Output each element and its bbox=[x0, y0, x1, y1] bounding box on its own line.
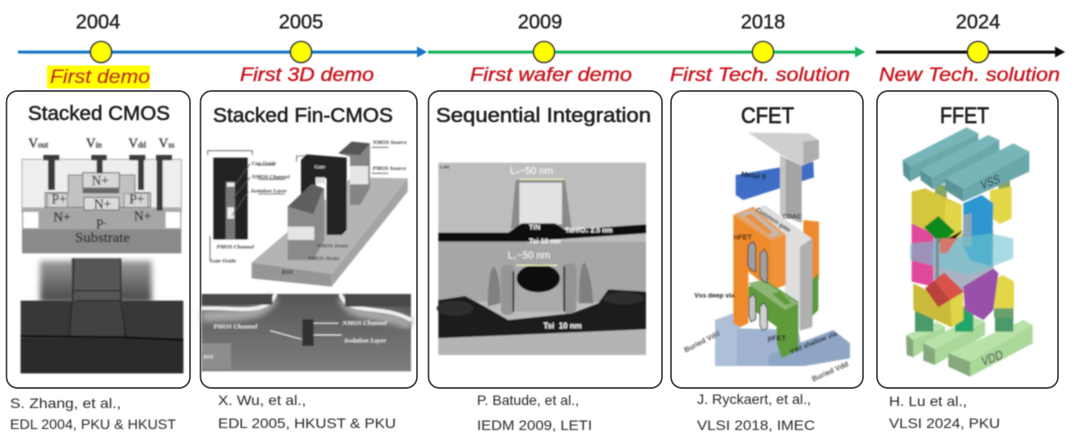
citation: Batude: P. Batude, et al., bbox=[477, 392, 579, 408]
diagram: CMOS cross-section: N+ bbox=[53, 209, 70, 224]
milestone: First wafer demo: First wafer demo bbox=[470, 65, 632, 86]
arrow: blue segment bbox=[18, 46, 427, 58]
photo: SEM cross-section: Isolation Layer bbox=[343, 338, 387, 345]
diagram: CMOS cross-section: N+ bbox=[134, 209, 151, 224]
milestone: First 3D demo: First 3D demo bbox=[240, 65, 374, 86]
citation: Wu: EDL 2005, HKUST & PKU bbox=[218, 415, 396, 431]
heading: Sequential Integration: Sequential Integration bbox=[436, 105, 651, 127]
year 2009 marker: 2009 bbox=[518, 12, 562, 34]
year 2005 marker bbox=[279, 12, 323, 62]
panel: Sequential Integration bbox=[428, 91, 662, 433]
citation: Ryckaert: VLSI 2018, IMEC bbox=[697, 417, 815, 433]
diagram: fin device 3D view: BOX bbox=[282, 270, 294, 276]
milestone: New Tech. solution: New Tech. solution bbox=[879, 65, 1060, 86]
heading: Stacked Fin-CMOS: Stacked Fin-CMOS bbox=[213, 105, 393, 127]
diagram: CFET 3D structure: pFET bbox=[768, 334, 786, 343]
diagram: CMOS cross-section: N+ bbox=[94, 197, 111, 212]
diagram: CMOS cross-section: P+ bbox=[52, 191, 67, 206]
photo: SEM cross-section: BOX bbox=[202, 356, 214, 361]
panel: Stacked Fin-CMOS bbox=[200, 91, 417, 431]
arrow: black segment bbox=[876, 46, 1065, 58]
diagram: CFET 3D structure bbox=[682, 133, 850, 383]
diagram: fin device 3D view: Gate Oxide bbox=[210, 259, 237, 265]
diagram: fin device 3D view: NMOS Drain bbox=[316, 243, 348, 249]
diagram: fin device 3D view: NMOS Channel bbox=[251, 175, 290, 181]
diagram: CMOS cross-section bbox=[22, 135, 181, 253]
diagram: FFET 3D structure bbox=[903, 127, 1033, 377]
photo: SEM cross-section: NMOS Channel bbox=[341, 320, 387, 327]
panel: Stacked CMOS bbox=[6, 91, 190, 432]
diagram: CFET 3D structure: Vdd shallow via bbox=[789, 331, 838, 356]
year 2005 marker: 2005 bbox=[279, 12, 323, 34]
photo: TEM of sequential transistors: Lₙ~50 nm bbox=[510, 166, 553, 177]
year 2018 marker bbox=[741, 12, 785, 62]
diagram: fin device 3D view: PMOS Drain bbox=[308, 256, 339, 262]
year 2018 marker: 2018 bbox=[741, 12, 785, 34]
diagram: CMOS cross-section: Vin bbox=[86, 135, 102, 150]
diagram: FFET 3D structure: VDD bbox=[981, 347, 1004, 369]
diagram: fin device 3D view: Gate bbox=[314, 165, 326, 171]
diagram: FFET 3D structure: VSS bbox=[980, 172, 1001, 192]
diagram: CFET 3D structure: Metal 0 bbox=[741, 170, 766, 181]
timeline bbox=[18, 12, 1065, 88]
citation: Zhang: S. Zhang, et al., bbox=[10, 395, 121, 411]
citation: Batude bbox=[477, 392, 592, 433]
photo: TEM of sequential transistors bbox=[437, 163, 646, 355]
diagram: CFET 3D structure: CDAC bbox=[782, 214, 802, 221]
diagram: CFET 3D structure: Vss deep via bbox=[694, 292, 735, 299]
diagram: CFET 3D structure: Common gate bbox=[755, 207, 792, 234]
diagram: fin device 3D view: PMOS Channel bbox=[217, 245, 254, 251]
photo: TEM cross-section bbox=[21, 258, 183, 373]
panel: CFET bbox=[671, 91, 863, 433]
diagram: fin device 3D view bbox=[208, 140, 408, 287]
citation: Ryckaert: J. Ryckaert, et al., bbox=[697, 391, 811, 407]
citation: Batude: IEDM 2009, LETI bbox=[477, 417, 592, 433]
photo: TEM of sequential transistors: Tsi 10 nm bbox=[543, 322, 582, 331]
diagram: fin device 3D view: Isolation Layer bbox=[250, 189, 287, 195]
year 2024 marker: 2024 bbox=[956, 12, 1000, 34]
citation: Ryckaert bbox=[697, 391, 815, 433]
year 2009 marker bbox=[518, 12, 562, 62]
diagram: fin device 3D view: Cap Oxide bbox=[252, 161, 277, 167]
year 2004 marker: 2004 bbox=[76, 12, 120, 34]
year 2004 marker bbox=[76, 12, 120, 62]
year 2024 marker bbox=[956, 12, 1000, 62]
photo: SEM cross-section: PMOS Channel bbox=[213, 324, 257, 331]
photo: TEM of sequential transistors: L꜀~50 nm bbox=[508, 251, 550, 262]
diagram: CMOS cross-section: N+ bbox=[92, 173, 109, 188]
citation: Wu: X. Wu, et al., bbox=[218, 392, 306, 408]
photo: SEM cross-section bbox=[202, 294, 411, 371]
citation: Wu bbox=[218, 392, 396, 431]
photo: TEM of sequential transistors: TaHfO₂ 2.5 nm bbox=[565, 228, 613, 235]
milestone: First demo: First demo bbox=[50, 67, 150, 88]
milestone: First Tech. solution: First Tech. solution bbox=[670, 65, 850, 86]
diagram: CFET 3D structure: Buried Vdd bbox=[682, 329, 721, 354]
arrow: green segment bbox=[428, 46, 865, 58]
heading: Stacked CMOS: Stacked CMOS bbox=[28, 103, 170, 125]
diagram: CMOS cross-section: Substrate bbox=[75, 230, 130, 245]
diagram: CMOS cross-section: P bbox=[96, 217, 103, 232]
diagram: CMOS cross-section: Vdd bbox=[128, 135, 146, 150]
citation: Zhang: EDL 2004, PKU & HKUST bbox=[10, 416, 176, 432]
diagram: CMOS cross-section: P+ bbox=[129, 191, 144, 206]
photo: TEM of sequential transistors: TIN bbox=[529, 224, 540, 231]
citation: Lu bbox=[889, 393, 1000, 431]
heading: FFET: FFET bbox=[940, 103, 989, 128]
citation: Lu: VLSI 2024, PKU bbox=[889, 415, 1000, 431]
diagram: fin device 3D view: PMOS Source bbox=[373, 166, 407, 172]
diagram: fin device 3D view: NMOS Source bbox=[372, 140, 407, 146]
diagram: CFET 3D structure: nFET bbox=[734, 232, 753, 241]
diagram: CMOS cross-section: Vss bbox=[159, 135, 175, 150]
diagram: CMOS cross-section: - bbox=[103, 218, 106, 227]
photo: TEM of sequential transistors: Tsi 10 nm bbox=[529, 238, 561, 245]
photo: TEM of sequential transistors: Leti bbox=[440, 165, 450, 171]
panel: FFET bbox=[877, 91, 1058, 431]
citation: Lu: H. Lu et al., bbox=[889, 393, 967, 409]
heading: CFET: CFET bbox=[741, 103, 794, 128]
diagram: CFET 3D structure: Buried Vdd bbox=[810, 359, 850, 383]
citation: Zhang bbox=[10, 395, 176, 432]
diagram: CMOS cross-section: Vout bbox=[28, 135, 49, 150]
